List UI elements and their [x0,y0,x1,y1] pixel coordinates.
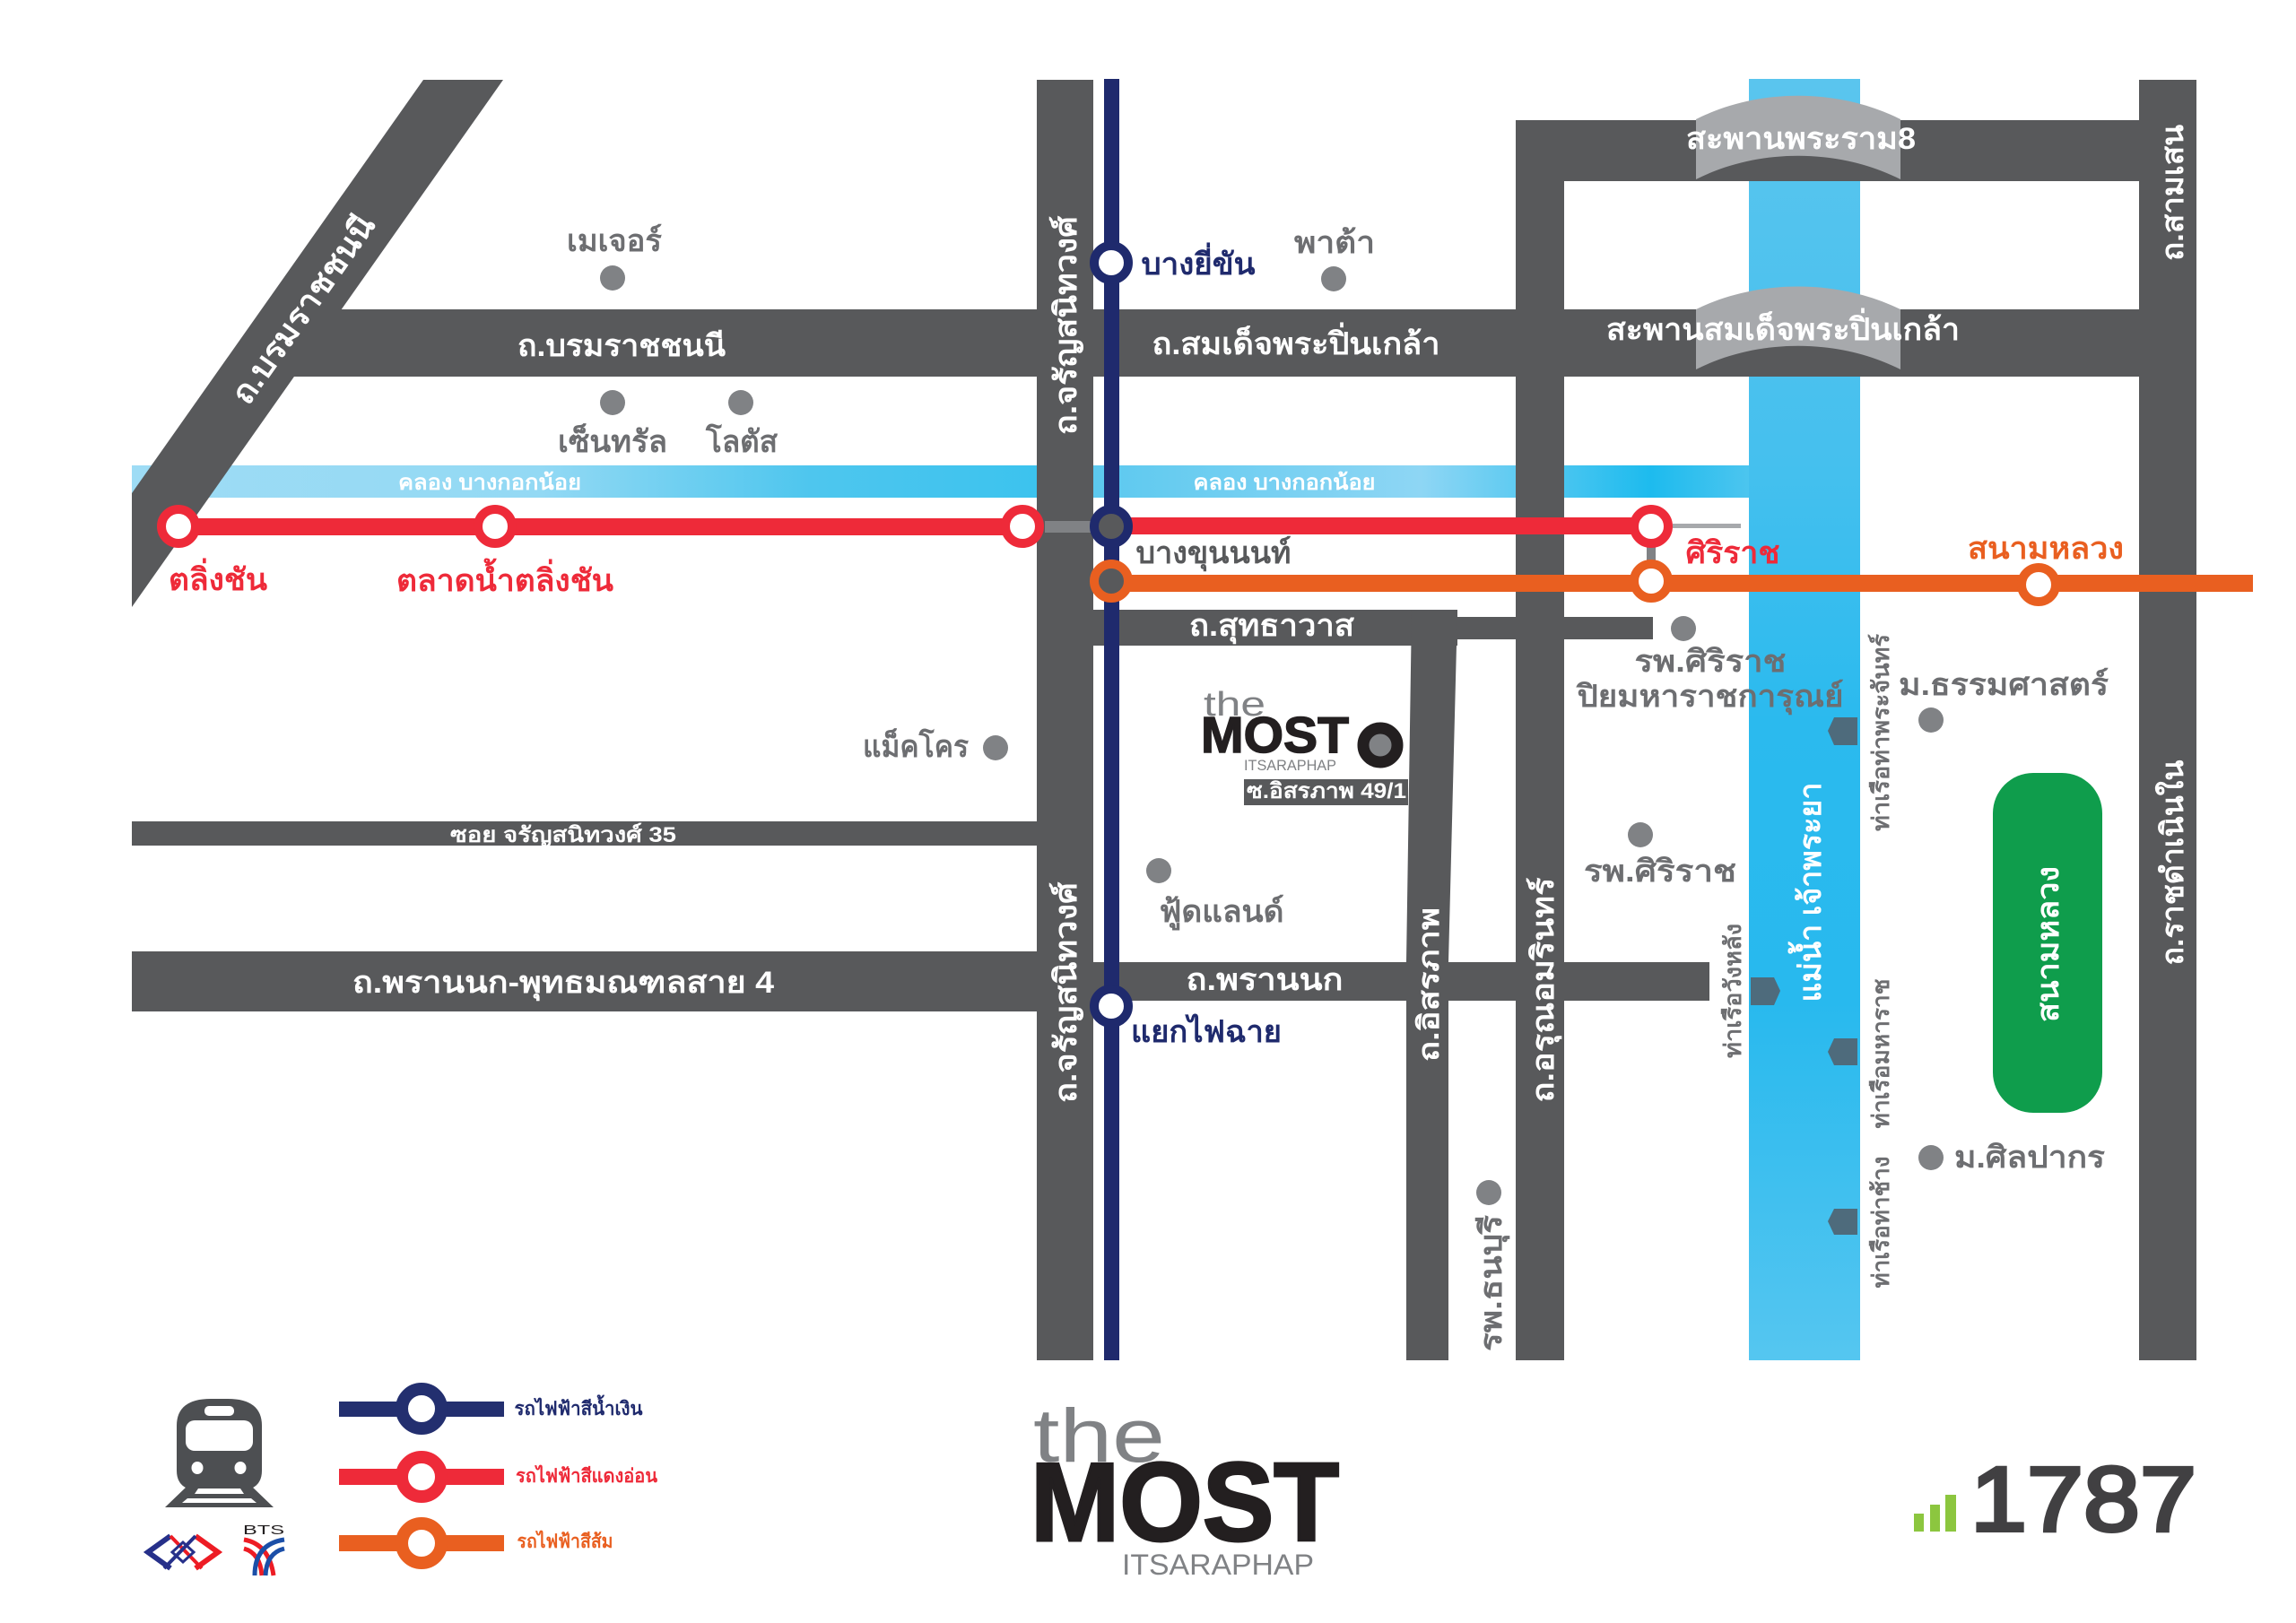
legend: light red line: รถไฟฟ้าสีแดงอ่อน [516,1464,658,1487]
label: Charansanitwong lower: ถ.จรัญสนิทวงศ์ [1048,882,1084,1103]
label: Rama 8 bridge: สะพานพระราม8 [1686,122,1916,156]
label: Taling Chan: ตลิ่งชัน [169,558,267,597]
label: Talat Nam Taling Chan: ตลาดน้ำตลิ่งชัน [396,558,613,598]
station: Bang Khun Non blue [1094,509,1128,543]
label: Ratchadamnoen Nai: ถ.ราชดำเนินใน [2154,760,2190,965]
label: Itsaraphap: ถ.อิสรภาพ [1413,907,1445,1062]
label: Charansanitwong upper: ถ.จรัญสนิทวงศ์ [1048,216,1084,435]
station: red line terminus [1005,509,1039,543]
label: Arun Amarin: ถ.อรุณอมรินทร์ [1526,877,1562,1102]
label: Chao Phraya River: แม่น้ำ เจ้าพระยา [1787,782,1828,1002]
project marker logo on map: MOST [1201,707,1349,764]
label: Tha Chang Pier: ท่าเรือท่าช้าง [1867,1157,1894,1288]
legend: blue line [339,1389,643,1428]
label: Siriraj Piyamaharajkarun Hospital: ปิยมหาราชการุณย์ [1576,679,1844,716]
label: Phran Nok Phutthamonthon 4: ถ.พรานนก-พุทธมณฑลสาย 4 [352,966,774,1002]
label: Sanam Luang station: สนามหลวง [1968,532,2124,566]
label: Siriraj Piyamaharajkarun Hospital [1576,645,1844,716]
landmarks dots [600,265,1944,1205]
label: Somdet Phra Pinklao bridge: สะพานสมเด็จพระปิ่นเกล้า [1606,308,1960,347]
legend: orange line: รถไฟฟ้าสีส้ม [517,1530,613,1552]
landmark labels [558,223,2109,1351]
label: Wang Lang Pier: ท่าเรือวังหลัง [1719,924,1746,1058]
label: Maharaj Pier: ท่าเรือมหาราช [1867,979,1894,1128]
connector: red line to Bang Khun Non [1045,521,1111,533]
label: Makro: แม็คโคร [863,727,970,764]
label: Borommaratchachonnani: ถ.บรมราชชนนี [517,329,726,363]
red line [178,517,1651,535]
project address tag: ซ.อิสรภาพ 49/1 [1247,779,1406,803]
pier markers [1751,717,1857,1235]
label: Borommaratchachonnani diagonal: ถ.บรมราชชนนี [224,207,382,411]
label: Silpakorn: ม.ศิลปากร [1954,1141,2106,1175]
park: Sanam Luang [1993,773,2102,1113]
station: Taling Chan [161,509,196,543]
connector: Siriraj interchange [1647,534,1656,575]
station: Bang Yi Khan [1094,246,1128,280]
label: Phran Nok: ถ.พรานนก [1186,963,1344,997]
label: Siriraj Piyamaharajkarun Hospital: รพ.ศิริราช [1634,645,1787,679]
label: Tha Phra Chan Pier: ท่าเรือท่าพระจันทร์ [1867,634,1894,831]
station: Yaek Fai Chai [1094,989,1128,1023]
bridge: Rama 8 [1696,96,1900,179]
station: Siriraj red [1634,509,1668,543]
label: Pata: พาต้า [1294,226,1375,260]
label: Sanam Luang park: สนามหลวง [2031,866,2066,1022]
label: Thammasat: ม.ธรรมศาสตร์ [1899,667,2109,702]
label: Major: เมเจอร์ [567,223,663,258]
label: Samsen: ถ.สามเสน [2156,125,2190,261]
label: Yaek Fai Chai: แยกไฟฉาย [1131,1013,1282,1049]
logo: the MOST Itsaraphap: ITSARAPHAP [1122,1549,1314,1581]
label: Foodland: ฟู้ดแลนด์ [1159,894,1284,931]
project marker logo on map [1201,686,1397,774]
legend: light red line [339,1457,658,1497]
blue line [1104,79,1119,1360]
label: Central: เซ็นทรัล [558,422,667,459]
station labels [169,242,2124,1049]
orange line [1111,575,2253,592]
station: Bang Khun Non orange [1094,564,1128,598]
station: Siriraj orange [1634,564,1668,598]
icon: train [165,1399,274,1507]
label: Lotus: โลตัส [705,423,778,459]
label: Bang Khun Non: บางขุนนนท์ [1135,535,1292,572]
legend: blue line: รถไฟฟ้าสีน้ำเงิน [515,1394,643,1419]
logo: the MOST Itsaraphap: MOST [1031,1441,1339,1565]
river: Chao Phraya [1749,79,1860,1360]
label: Sutthawat: ถ.สุทธาวาส [1189,609,1354,645]
canal: Khlong Bangkok Noi west [132,465,1037,498]
label: Siriraj station: ศิริราช [1686,536,1779,570]
label: Soi Charansanitwong 35: ซอย จรัญสนิทวงศ์ 35 [450,822,676,847]
label: Khlong Bangkok Noi east: คลอง บางกอกน้อย [1193,471,1376,495]
project marker logo on map: ITSARAPHAP [1244,757,1336,774]
icon: BTS logo: BTS [243,1523,284,1538]
label: Siriraj Hospital: รพ.ศิริราช [1584,855,1736,889]
station: Talat Nam Taling Chan [478,509,512,543]
road and canal labels [224,122,2190,1103]
canal: Khlong Bangkok Noi east [1093,465,1749,498]
logo: the MOST Itsaraphap: the [1033,1393,1165,1478]
label: Thonburi Hospital: รพ.ธนบุรี [1474,1214,1510,1351]
project marker logo on map: the [1204,686,1265,724]
label: Somdet Phra Pinklao road: ถ.สมเด็จพระปิ่นเกล้า [1152,322,1440,361]
label: Khlong Bangkok Noi west: คลอง บางกอกน้อย [398,471,581,495]
label: Bang Yi Khan: บางยี่ขัน [1141,242,1256,282]
logo: the MOST Itsaraphap [1031,1393,1339,1581]
icon: MRT logo [148,1536,218,1568]
connector: Siriraj extension [1673,524,1741,528]
bridge: Somdet Phra Pinklao [1696,287,1900,369]
road network [132,80,2196,1360]
logo: 1787 hotline: 1787 [1970,1448,2196,1550]
icon: BTS logo [243,1523,284,1575]
station: Sanam Luang orange [2022,568,2056,602]
legend: orange line [339,1523,613,1563]
